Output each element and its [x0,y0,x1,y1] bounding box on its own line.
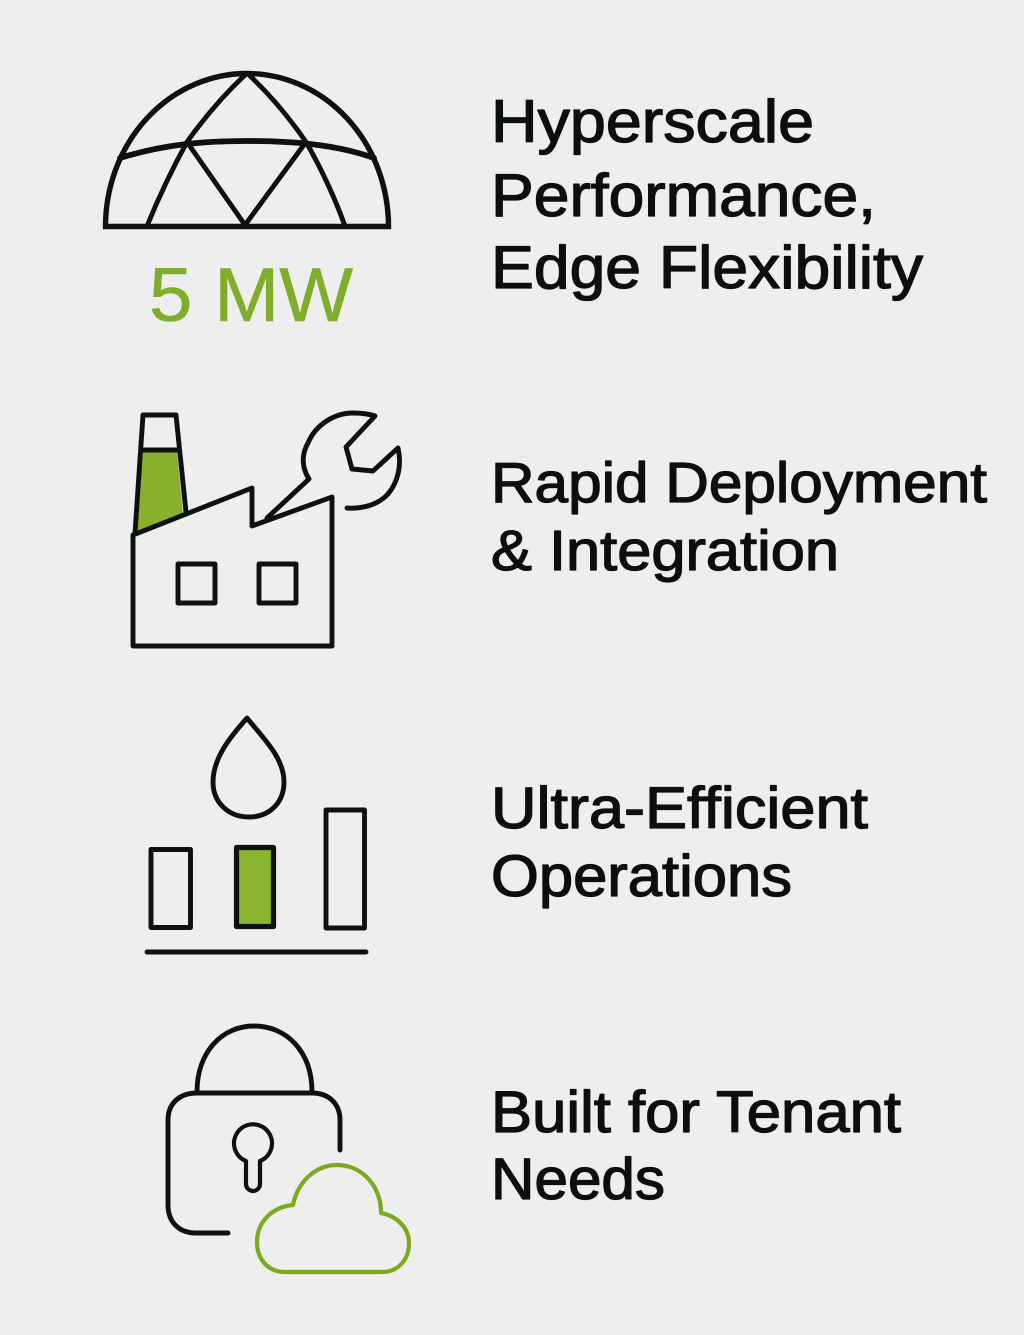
icon: geodesic dome [106,74,388,227]
heading: built for tenant needs: Needs [491,1147,665,1212]
heading: ultra-efficient operations: Operations [491,844,792,909]
heading: ultra-efficient operations [491,776,868,909]
capacity label: 5 MW: 5 MW [149,253,353,338]
heading: hyperscale performance: Performance, [491,162,876,229]
icon: factory with wrench [133,413,400,646]
icon: padlock and cloud [168,1026,409,1272]
heading: rapid deployment [491,451,987,583]
heading: hyperscale performance: Edge Flexibility [491,234,923,301]
heading: rapid deployment: Rapid Deployment [491,451,987,515]
icon: water drop and bars [147,718,366,952]
heading: hyperscale performance: Hyperscale [491,88,814,155]
heading: built for tenant needs: Built for Tenant [491,1080,901,1145]
heading: built for tenant needs [491,1080,901,1212]
heading: ultra-efficient operations: Ultra-Efficient [491,776,868,841]
heading: rapid deployment: & Integration [491,519,839,583]
heading: hyperscale performance [491,88,923,301]
